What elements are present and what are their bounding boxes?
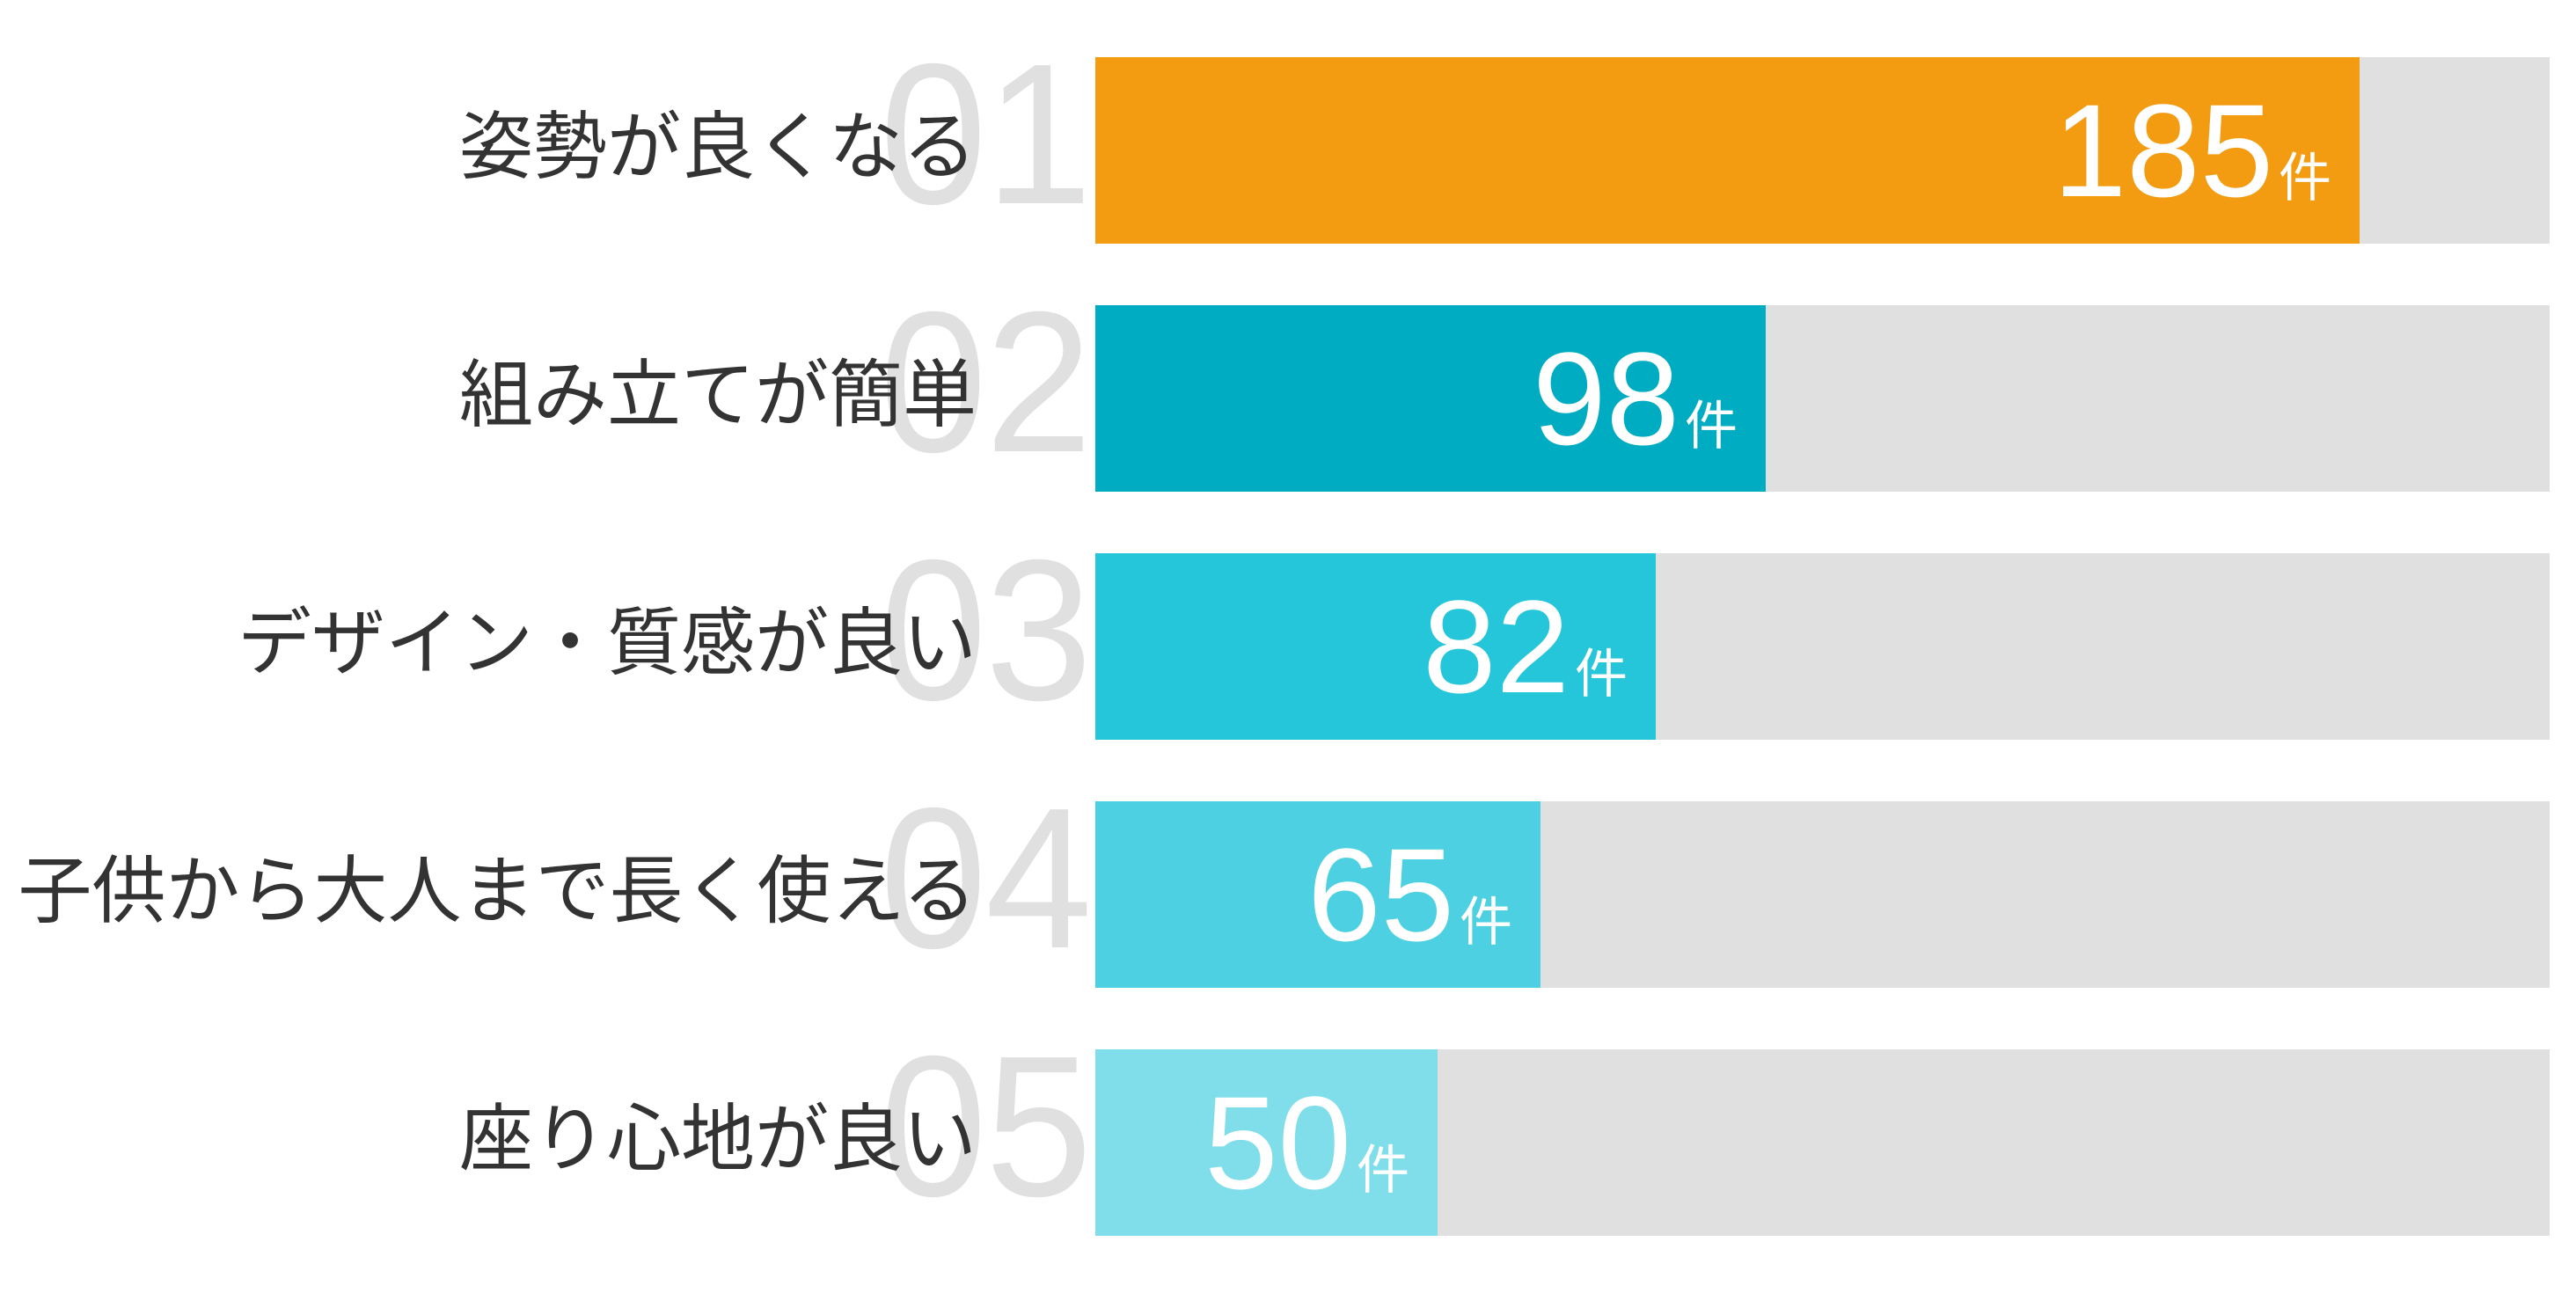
bar 1	[1095, 57, 2550, 244]
rank number 02: 02	[880, 271, 1091, 494]
rank number 03: 03	[880, 519, 1091, 742]
row 2	[459, 271, 2550, 494]
label 4: 子供から大人まで長く使える	[18, 850, 977, 932]
bar 3: 82件	[1423, 573, 1628, 720]
bar 2	[1095, 305, 2550, 492]
label 3: デザイン・質感が良い	[238, 602, 977, 684]
row 3	[238, 519, 2550, 742]
bar 3	[1095, 553, 2550, 740]
rank number 01: 01	[880, 23, 1091, 246]
row 5	[459, 1015, 2550, 1238]
bar 4	[1095, 801, 2550, 988]
rank number 04: 04	[880, 767, 1091, 990]
bar 5	[1095, 1049, 2550, 1236]
bar 2: 98件	[1533, 325, 1738, 472]
rank number 05: 05	[880, 1015, 1091, 1238]
bar 4: 65件	[1307, 821, 1512, 968]
row 1	[459, 23, 2550, 246]
row 4	[18, 767, 2550, 990]
bar 5: 50件	[1204, 1069, 1409, 1216]
bar 1: 185件	[2053, 77, 2331, 224]
label 2: 組み立てが簡単	[459, 354, 977, 436]
label 1: 姿勢が良くなる	[459, 106, 977, 188]
label 5: 座り心地が良い	[459, 1098, 977, 1180]
